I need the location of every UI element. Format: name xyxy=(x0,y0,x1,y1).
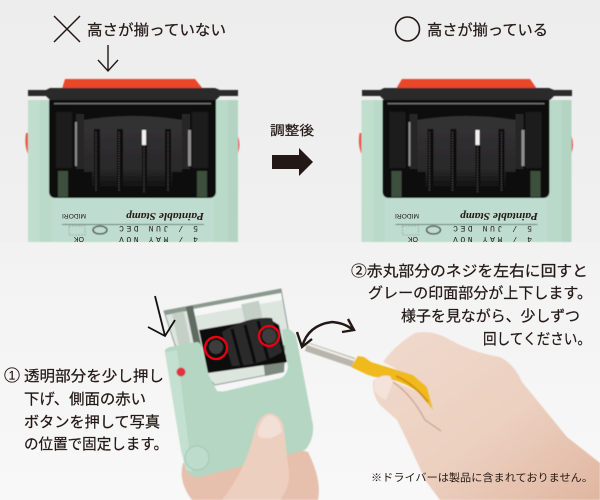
step 1 number xyxy=(5,368,19,382)
stamp label: Paintable Stamp right: 4 / MAY NOV xyxy=(453,234,532,243)
stamp label: Paintable Stamp right: 5 / JUN DEC xyxy=(453,223,532,232)
clear cover xyxy=(164,289,290,385)
black number wheels xyxy=(199,318,287,373)
text block: step 1: 下げ、側面の赤い xyxy=(24,391,146,408)
red circle: left screw xyxy=(205,337,227,359)
text block: step 2: 様子を見ながら、少しずつ xyxy=(401,308,580,325)
top frame bar xyxy=(28,88,238,100)
green body xyxy=(165,329,313,477)
text block: step 2: 回してください。 xyxy=(483,331,591,348)
arrow: points down to uneven face xyxy=(98,45,118,71)
heading: aligned: 高さが揃っている xyxy=(427,22,548,39)
text block: step 1: の位置で固定します。 xyxy=(24,436,168,453)
red button xyxy=(176,368,186,376)
stamp label: Paintable Stamp right xyxy=(395,210,538,243)
stamp label: Paintable Stamp: 4 / MAY NOV xyxy=(119,234,198,243)
stamp label: Paintable Stamp: MIDORI xyxy=(62,212,86,218)
arrow: press down xyxy=(148,296,175,336)
right hand xyxy=(373,332,600,500)
step 1 number: 1 xyxy=(9,368,16,382)
panel: after adjustment, stamp aligned xyxy=(359,79,573,242)
red stamp face, uneven xyxy=(62,79,203,89)
stamp label: Paintable Stamp: OK xyxy=(74,235,84,242)
top frame bar xyxy=(362,88,572,100)
text block: step 1 xyxy=(5,368,168,453)
stamp label: Paintable Stamp right: Paintable Stamp xyxy=(459,210,538,222)
screws xyxy=(209,340,223,354)
thumb crease xyxy=(393,382,441,431)
stamp label: Paintable Stamp: 5 / JUN DEC xyxy=(119,223,198,232)
red stamp face, even xyxy=(396,79,537,89)
thumb xyxy=(222,413,289,500)
panel: before adjustment, stamp uneven xyxy=(25,79,240,242)
stamp label: Paintable Stamp right: MIDORI xyxy=(395,212,419,218)
text block: step 2 xyxy=(351,263,592,348)
left hand palm xyxy=(182,440,319,500)
background: top panel xyxy=(0,0,600,242)
text block: step 1: ボタンを押して写真 xyxy=(24,413,160,431)
x mark xyxy=(54,16,80,42)
red circle: right screw xyxy=(259,326,279,346)
label: after adjustment: 調整後 xyxy=(270,123,314,138)
stamp label: Paintable Stamp: Paintable Stamp xyxy=(125,210,204,222)
circle mark xyxy=(396,17,420,41)
arrow: to the right xyxy=(272,148,313,176)
text block: step 2: ②赤丸部分のネジを左右に回すと xyxy=(351,263,588,280)
note: driver not included: ※ドライバーは製品に含まれておりません。 xyxy=(371,471,593,484)
background: bottom panel xyxy=(0,242,600,500)
screwdriver handle xyxy=(351,356,433,410)
stamp label: Paintable Stamp right: OK xyxy=(408,235,418,242)
text block: step 1: 透明部分を少し押し xyxy=(24,368,164,385)
text block: step 2: グレーの印面部分が上下します。 xyxy=(368,285,592,302)
thumb nail xyxy=(374,376,393,400)
stamp label: Paintable Stamp xyxy=(62,210,204,243)
photo: stamp with hands xyxy=(164,289,600,500)
heading: not aligned: 高さが揃っていない xyxy=(87,22,226,39)
arrow: rotate screw xyxy=(297,319,354,347)
screwdriver shaft xyxy=(305,342,355,367)
